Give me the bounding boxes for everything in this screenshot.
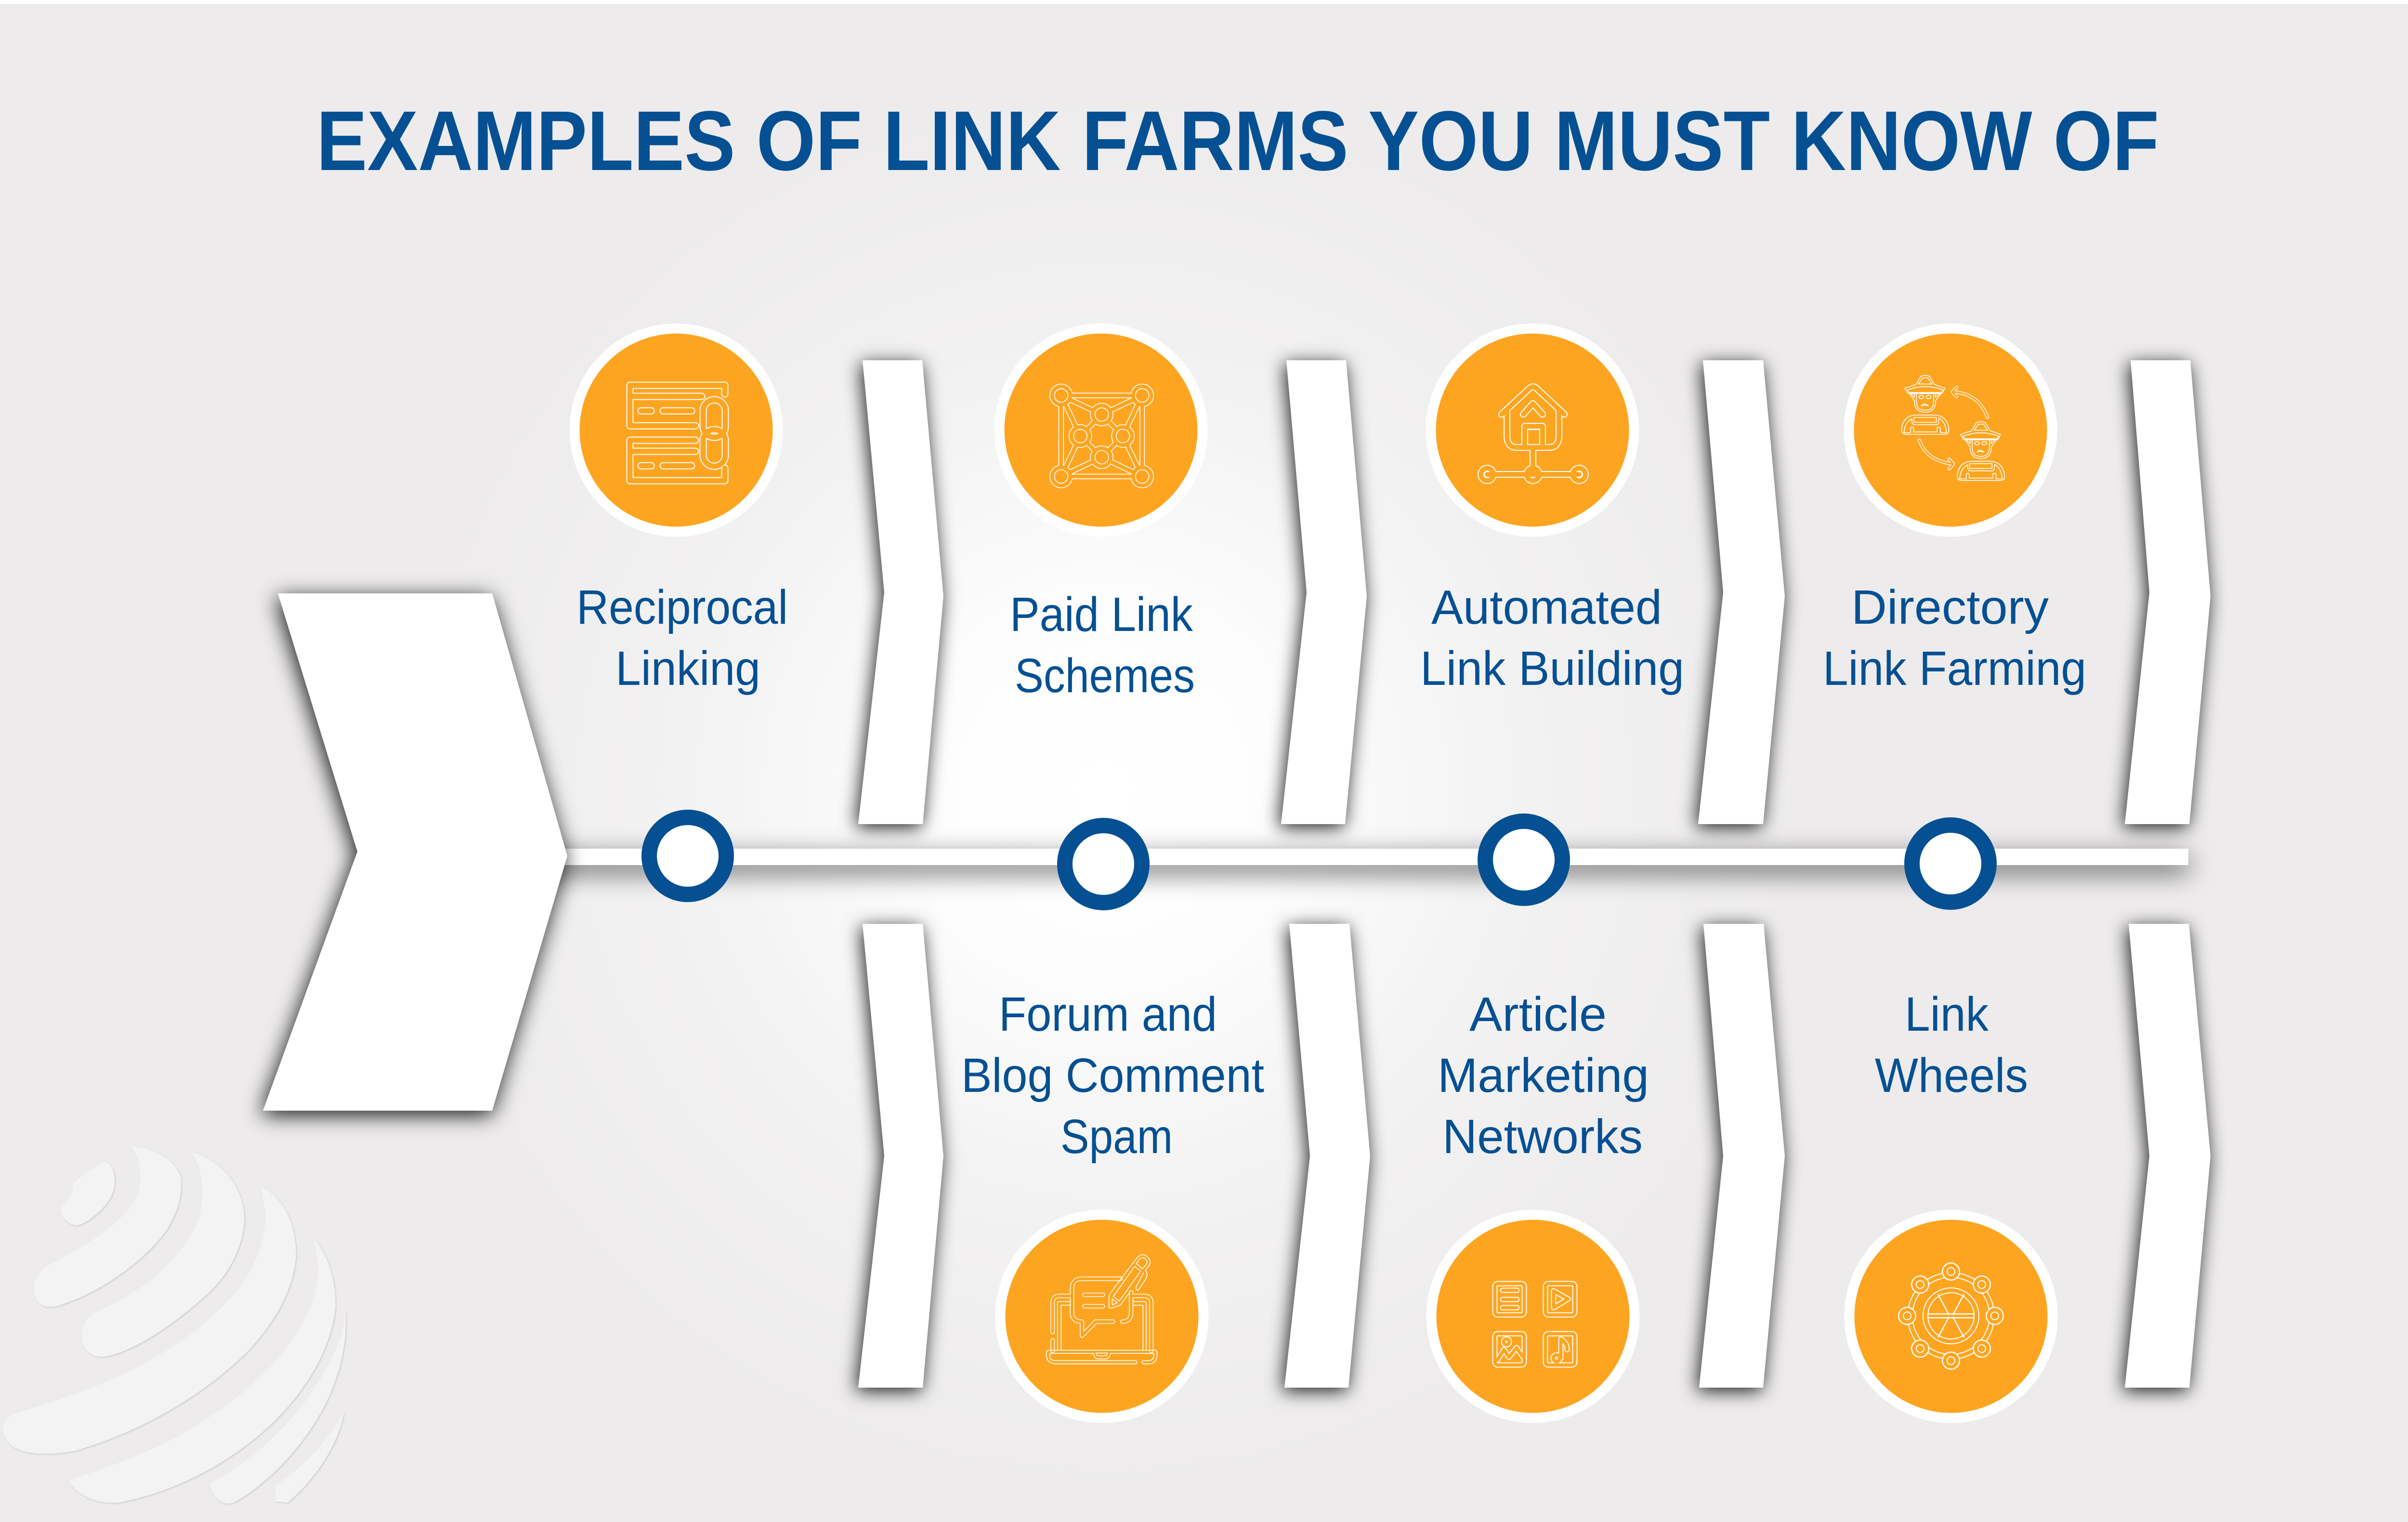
upper chevrons [858, 360, 2211, 824]
spine node rings [649, 817, 1989, 903]
label: link wheels: Wheels [1875, 1049, 2028, 1102]
icon: forum and blog comment spam [1000, 1215, 1204, 1418]
label: paid link schemes [1010, 588, 1195, 703]
label: automated link building: Automated [1431, 580, 1662, 634]
label: reciprocal linking: Linking [615, 642, 760, 695]
title: EXAMPLES OF LINK FARMS YOU MUST KNOW OF [316, 94, 2159, 188]
label: directory link farming: Directory [1851, 580, 2049, 634]
fish head chevron [263, 593, 567, 1111]
label: reciprocal linking: Reciprocal [576, 580, 788, 634]
label: forum and blog comment spam [961, 987, 1264, 1164]
icon: link wheels [1849, 1215, 2053, 1418]
label: automated link building: Link Building [1420, 642, 1684, 695]
label: forum and blog comment spam: Forum and [999, 987, 1217, 1041]
spine line [530, 849, 2188, 865]
label: automated link building [1420, 580, 1684, 695]
label: article marketing networks [1438, 987, 1649, 1164]
lower chevrons [858, 924, 2211, 1388]
label: directory link farming: Link Farming [1823, 642, 2086, 695]
icon: reciprocal linking [575, 328, 778, 532]
label: article marketing networks: Networks [1442, 1110, 1643, 1164]
label: link wheels [1875, 987, 2028, 1102]
label: paid link schemes: Schemes [1015, 649, 1195, 703]
label: directory link farming [1823, 580, 2086, 695]
label: paid link schemes: Paid Link [1010, 588, 1193, 642]
icon: paid link schemes [999, 328, 1203, 532]
label: article marketing networks: Article [1469, 987, 1607, 1041]
label: forum and blog comment spam: Spam [1060, 1110, 1173, 1164]
label: forum and blog comment spam: Blog Comment [961, 1049, 1264, 1102]
globe watermark [3, 1146, 346, 1504]
icon: automated link building [1431, 328, 1634, 532]
label: reciprocal linking [576, 580, 788, 695]
label: link wheels: Link [1905, 987, 1989, 1041]
icon: article marketing networks [1431, 1215, 1635, 1418]
icon: directory link farming [1849, 328, 2052, 532]
label: article marketing networks: Marketing [1438, 1049, 1649, 1102]
